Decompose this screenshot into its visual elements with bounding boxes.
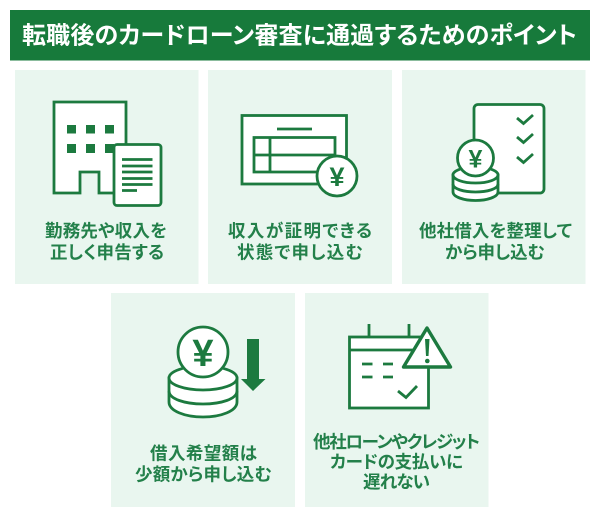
label text: 他社借入を整理して [419,221,572,241]
icon: calendar with warning [350,324,450,408]
icon: coins and down arrow [169,327,266,417]
icon: income statement and yen coin [242,116,357,196]
panel: 収入が証明できる状態で申し込む: 状態で申し込む [237,242,363,262]
label text: 収入が証明できる [228,221,372,241]
icon: building and document [54,102,161,206]
panel: 借入希望額は少額から申し込む [111,293,295,507]
panel: 収入が証明できる状態で申し込む [208,70,392,284]
panel: 他社ローンやクレジットカードの支払いに遅れない: カードの支払いに [330,452,463,472]
title bar [10,10,590,60]
label text: 借入希望額は [150,444,257,464]
icon: income statement and yen coin: ¥ [329,162,345,192]
panel: 他社借入を整理してから申し込む: から申し込む [445,242,545,262]
panel: 他社ローンやクレジットカードの支払いに遅れない [305,293,488,507]
panel: 勤務先や収入を正しく申告する: 正しく申告する [50,242,164,262]
panel: 借入希望額は少額から申し込む: 少額から申し込む [135,464,272,484]
panel: 他社借入を整理してから申し込む [402,70,586,284]
panel: 他社ローンやクレジットカードの支払いに遅れない: 遅れない [363,472,430,492]
title bar: 転職後のカードローン審査に通過するためのポイント [22,22,577,50]
icon: checklist and coins: ¥ [469,146,483,174]
icon: checklist and coins [453,104,544,200]
icon: coins and down arrow: ¥ [192,333,214,375]
panel: 勤務先や収入を正しく申告する [15,70,198,284]
label text: 勤務先や収入を [45,221,167,241]
label text: 他社ローンやクレジット [313,432,480,452]
